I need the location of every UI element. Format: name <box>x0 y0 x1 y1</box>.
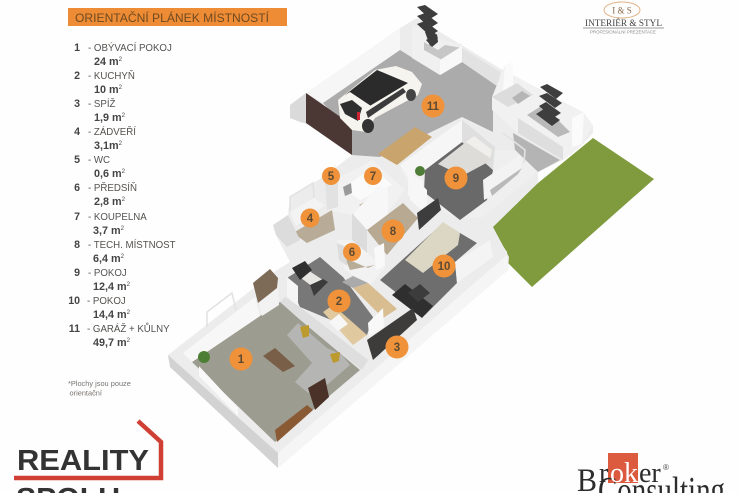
logo: Reality Spolu: REALITY <box>17 445 149 477</box>
legend item 6 <box>74 182 137 208</box>
panel: room legend <box>68 8 287 398</box>
marker 3: 3 <box>394 342 400 354</box>
legend item 8 <box>74 239 176 265</box>
garage floor <box>323 50 500 157</box>
railings <box>199 293 238 416</box>
legend item 7 <box>74 211 147 237</box>
bookcase <box>455 240 493 283</box>
legend item 8: 6,4 m <box>93 253 121 265</box>
desk and rug <box>392 284 433 318</box>
shelf: shed <box>536 84 563 126</box>
footnote: orientační <box>70 388 103 398</box>
marker 5 <box>322 167 340 185</box>
legend item 3 <box>74 98 126 124</box>
legend item 4: 2 <box>119 141 123 147</box>
marker 11 <box>422 94 444 118</box>
garage door <box>306 93 352 155</box>
marker 4 <box>300 208 320 228</box>
wood bench <box>378 127 432 165</box>
legend item 10 <box>68 295 131 321</box>
room 10 bedroom <box>380 222 493 318</box>
garage walls and floor <box>290 24 500 165</box>
door <box>287 277 298 308</box>
sofa <box>405 222 460 273</box>
room 2 kitchen and dining <box>287 257 417 360</box>
legend item 3: - SPÍŽ <box>88 99 116 110</box>
legend item 1: 2 <box>119 57 123 63</box>
marker 8: 8 <box>390 226 397 238</box>
door with glass <box>408 173 423 207</box>
legend item 11: 49,7 m <box>93 337 127 349</box>
logo: Broker Consulting <box>577 453 725 493</box>
marker 1: 1 <box>238 354 245 366</box>
legend item 11 <box>69 323 170 349</box>
wall strip <box>280 297 368 370</box>
pantry shelves <box>367 308 417 360</box>
marker 10 <box>432 254 456 278</box>
legend item 11: 11 <box>69 323 80 335</box>
legend item 2: 2 <box>74 70 80 82</box>
marker 1 <box>230 348 252 370</box>
car <box>338 66 422 133</box>
slab front right face <box>278 255 508 468</box>
room 6 hallway <box>337 240 385 285</box>
room 9 bedroom <box>400 120 538 220</box>
legend item 8: 2 <box>121 254 125 260</box>
storage unit <box>412 24 462 75</box>
slab front left face <box>168 355 278 468</box>
shed front wall <box>518 118 563 160</box>
logo: Interiér & Styl: INTERIÉR & STYL <box>585 17 662 29</box>
marker 7: 7 <box>370 171 376 183</box>
logo: Interiér & Styl: I & S <box>612 6 632 16</box>
legend item 2 <box>74 70 135 96</box>
footnote <box>68 379 131 398</box>
heading: plan title <box>68 8 287 26</box>
bookcase <box>483 155 522 200</box>
shed floor <box>527 105 570 137</box>
legend item 5: 5 <box>74 154 80 166</box>
footnote: *Plochy jsou pouze <box>68 379 131 388</box>
kitchen counter <box>353 283 397 318</box>
logo: Broker Consulting: r <box>599 458 609 489</box>
cushions <box>300 325 309 338</box>
legend item 9: 2 <box>127 282 131 288</box>
marker 9: 9 <box>453 173 459 185</box>
legend item 9: 12,4 m <box>93 281 127 293</box>
legend item 3: 2 <box>122 113 126 119</box>
legend item 3: 1,9 m <box>94 112 122 124</box>
logo: Interiér & Styl: PROFESIONÁLNÍ PREZENTACE <box>590 28 656 36</box>
house base slab <box>168 18 593 468</box>
logo: Broker Consulting: er <box>639 458 661 489</box>
rooms 5 and 7 wc and bathroom <box>325 160 405 232</box>
legend item 2: 10 m <box>94 84 119 96</box>
shelf: garage top <box>417 5 438 47</box>
legend item 6: - PŘEDSÍŇ <box>88 183 137 194</box>
room markers <box>230 94 468 370</box>
marker 9 <box>444 166 468 190</box>
legend item 1: 24 m <box>94 56 119 68</box>
legend item 1 <box>74 42 172 68</box>
legend item 4: 3,1m <box>94 140 119 152</box>
legend item 3: 3 <box>74 98 80 110</box>
bookshelf <box>308 378 329 410</box>
legend item 1: - OBÝVACÍ POKOJ <box>88 43 172 54</box>
legend item 4: - ZÁDVEŘÍ <box>88 127 136 138</box>
legend item 7: 7 <box>74 211 80 223</box>
legend item 10: - POKOJ <box>87 296 126 307</box>
legend item 5: 0,6 m <box>94 168 122 180</box>
legend item 2: 2 <box>119 85 123 91</box>
dining table <box>297 265 323 290</box>
marker 5: 5 <box>328 171 335 183</box>
fridge <box>368 308 384 337</box>
heading: plan title: ORIENTAČNÍ PLÁNEK MÍSTNOSTÍ <box>75 12 270 25</box>
plant <box>198 351 210 363</box>
legend item 10: 10 <box>68 295 80 307</box>
legend item 10: 2 <box>127 310 131 316</box>
marker 10: 10 <box>438 261 450 273</box>
shelf: technical room <box>417 198 441 230</box>
shed area right <box>492 62 593 172</box>
logo: Broker Consulting: ok <box>610 458 638 489</box>
marker 8 <box>382 220 404 242</box>
legend item 8: - TECH. MÍSTNOST <box>88 240 176 251</box>
legend item 1: 1 <box>74 42 80 54</box>
marker 3 <box>386 336 408 358</box>
legend item 7: 2 <box>121 226 125 232</box>
legend item 7: - KOUPELNA <box>88 212 147 223</box>
logo: Broker Consulting: ® <box>663 463 669 472</box>
legend item 8: 8 <box>74 239 80 251</box>
legend item 4: 4 <box>74 126 80 138</box>
room 8 technical room <box>352 173 441 257</box>
pillar right <box>572 112 584 147</box>
sofa <box>287 323 350 393</box>
logo: Interiér & Styl <box>583 2 664 36</box>
marker 6 <box>343 243 361 261</box>
legend item 6: 2,8 m <box>94 196 122 208</box>
kitchen floor <box>287 257 373 335</box>
legend item 5: 2 <box>122 169 126 175</box>
legend item 9 <box>74 267 131 293</box>
wardrobe <box>253 269 279 316</box>
logo: Reality Spolu <box>14 421 161 493</box>
legend item 9: 9 <box>74 267 80 279</box>
marker 11: 11 <box>427 101 440 113</box>
garden lawn <box>488 138 654 287</box>
bed <box>438 142 492 176</box>
legend item 11: - GARÁŽ + KŮLNY <box>87 323 170 335</box>
legend item 6: 6 <box>74 182 80 194</box>
room 1 living room <box>183 269 368 442</box>
legend item 9: - POKOJ <box>88 268 127 279</box>
legend item 11: 2 <box>127 338 131 344</box>
room 4 entrance <box>273 183 335 247</box>
legend item 7: 3,7 m <box>93 225 121 237</box>
legend item 6: 2 <box>122 197 126 203</box>
marker 2: 2 <box>336 296 342 308</box>
marker 4: 4 <box>307 213 314 225</box>
corridor floor <box>513 133 560 172</box>
legend item 10: 14,4 m <box>93 309 127 321</box>
marker 2 <box>328 290 350 312</box>
coffee table <box>263 348 295 372</box>
cooktop <box>329 314 348 331</box>
floor <box>424 142 493 220</box>
legend item 4 <box>74 126 136 152</box>
marker 7 <box>364 167 382 185</box>
legend item 5: - WC <box>88 155 110 166</box>
sideboard <box>275 405 313 442</box>
plant <box>415 166 425 176</box>
legend item 2: - KUCHYŇ <box>88 71 135 82</box>
floor plan: 3D house <box>168 5 654 468</box>
marker 6: 6 <box>349 247 355 259</box>
window frame <box>503 133 525 163</box>
legend item 5 <box>74 154 126 180</box>
